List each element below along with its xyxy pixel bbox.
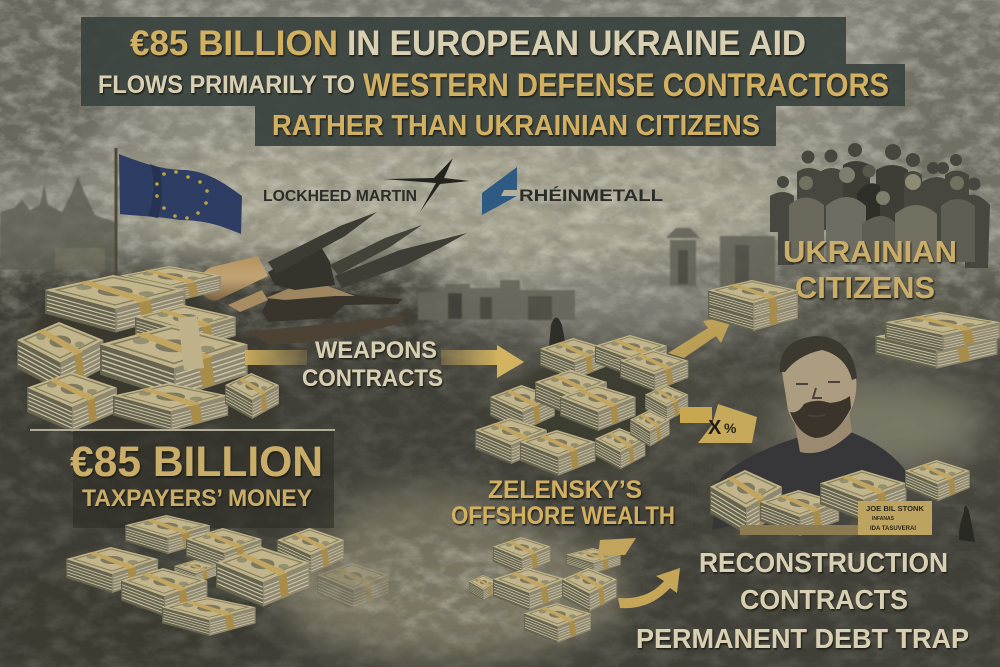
label: Ukrainian citizens: UKRAINIAN [783, 234, 957, 269]
arrow: weapons contracts flow [245, 345, 524, 378]
label: reconstruction contracts, permanent debt trap: CONTRACTS [740, 584, 908, 615]
panel: €85 billion taxpayers' money: TAXPAYERS’ MONEY [82, 485, 312, 512]
money stack: in front of portrait [710, 460, 970, 536]
title text [98, 24, 889, 142]
tan launch tubes [198, 256, 268, 300]
label: reconstruction contracts, permanent debt trap [636, 547, 969, 654]
missile launcher [198, 212, 467, 345]
money pile: bottom left [66, 515, 389, 636]
title text: WESTERN DEFENSE CONTRACTORS [363, 67, 889, 103]
logo: Lockheed Martin: LOCKHEED MARTIN [263, 188, 417, 205]
shirt [712, 430, 905, 530]
missile bodies [268, 212, 377, 274]
portrait: Zelensky [712, 336, 905, 530]
title text: RATHER THAN UKRAINIAN CITIZENS [272, 110, 760, 142]
money stack: far right [875, 312, 1000, 369]
back row silhouettes [770, 143, 990, 268]
label: Zelensky's offshore wealth [451, 476, 675, 530]
central launcher frame [268, 245, 335, 290]
label: Ukrainian citizens: CITIZENS [795, 270, 935, 305]
title text: IN EUROPEAN UKRAINE AID [347, 24, 806, 63]
central ruined buildings [418, 228, 775, 320]
icon: percent tag: X [708, 417, 722, 439]
title text: FLOWS PRIMARILY TO [98, 71, 355, 99]
panel: €85 billion taxpayers' money: €85 BILLION [70, 438, 323, 486]
sign: small contract plaque: IDA TASUVERAI [870, 526, 916, 532]
label: weapons contracts: WEAPONS [315, 337, 437, 364]
logo: Lockheed Martin [263, 158, 470, 212]
silhouette figure in ruins [549, 318, 566, 347]
money pile: bottom centre [469, 537, 636, 643]
icon: EU flag [114, 148, 242, 276]
silhouette figure near plaque [959, 506, 975, 542]
label: reconstruction contracts, permanent debt trap: PERMANENT DEBT TRAP [636, 623, 969, 654]
neck [794, 405, 852, 453]
label: weapons contracts: CONTRACTS [302, 365, 443, 392]
icon: percent tag: % [724, 420, 737, 436]
eyes, nose and mouth [796, 382, 840, 416]
label: Ukrainian citizens [783, 234, 957, 305]
label: weapons contracts [302, 337, 443, 392]
launcher ramp [245, 316, 405, 345]
title panel: stepped dark background [81, 17, 905, 146]
tracked base [262, 286, 402, 322]
icon: percent tag [680, 404, 757, 443]
icon: Lockheed star [383, 158, 470, 212]
face [782, 344, 856, 436]
label: Zelensky's offshore wealth: ZELENSKY’S [488, 476, 642, 504]
title text: €85 BILLION [130, 24, 338, 63]
arrow: flow to small stack [668, 316, 733, 358]
sign: small contract plaque: INFANAS [872, 516, 895, 522]
label: Zelensky's offshore wealth: OFFSHORE WEALTH [451, 502, 675, 530]
arrow: curved to reconstruction contracts [618, 568, 680, 608]
title banner [81, 17, 905, 146]
left distant skyline [0, 176, 115, 270]
panel: €85 billion taxpayers' money [30, 429, 335, 528]
money pile: €85 billion source [17, 266, 279, 432]
logo: Rheinmetall [482, 167, 663, 215]
money strap [178, 316, 204, 370]
Ukrainian citizens crowd [770, 143, 990, 268]
label: reconstruction contracts, permanent debt trap: RECONSTRUCTION [699, 547, 948, 578]
sign: small contract plaque [858, 501, 932, 535]
money stack: upper right small [708, 280, 798, 331]
logo: Rheinmetall: RHÉINMETALL [519, 186, 663, 205]
money pile: offshore wealth [475, 335, 688, 476]
hair [780, 336, 857, 380]
sign: small contract plaque: JOE BIL STONK [866, 506, 924, 513]
front row figures [789, 164, 975, 268]
beard [790, 396, 851, 438]
